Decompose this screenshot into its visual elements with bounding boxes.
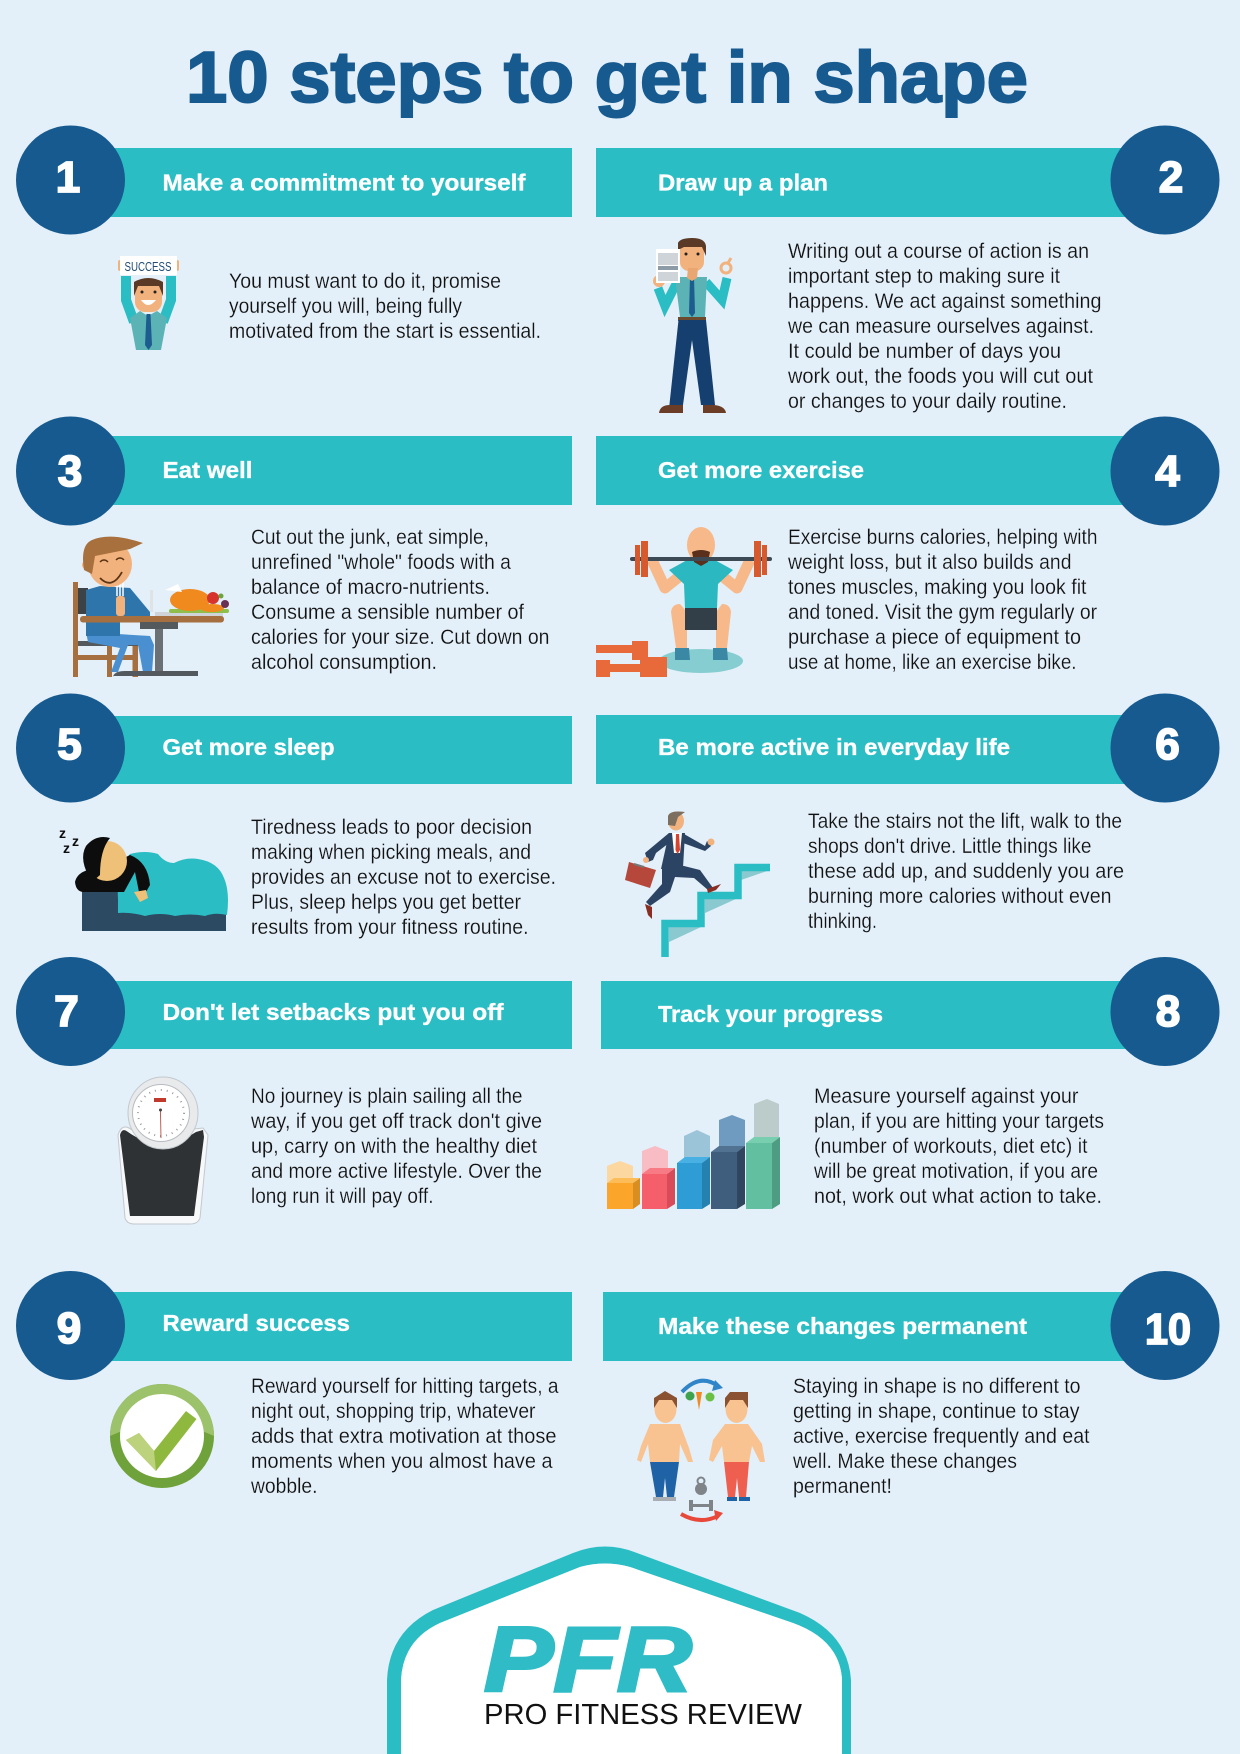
step 2 body text: important step to making sure it [788,265,1060,288]
step 3 heading: Eat well [162,457,252,483]
step 9 body text: adds that extra motivation at those [251,1425,556,1448]
step 10 body text: well. Make these changes [792,1450,1017,1473]
panel: step 9 [16,1271,572,1498]
step 6 body text: shops don't drive. Little things like [808,835,1092,858]
step 5 body text: Plus, sleep helps you get better [251,891,521,914]
logo: Pro Fitness Review badge [387,1546,851,1754]
step 7 body text: and more active lifestyle. Over the [251,1160,542,1183]
step 4 number badge: 4 [1155,447,1180,496]
step 2 body text [787,240,1102,413]
step 3 body text: alcohol consumption. [251,651,437,674]
step 7 heading: Don't let setbacks put you off [162,999,504,1025]
step 9 header bar [70,1292,572,1361]
title: 10 steps to get in shape [186,38,1028,118]
step 8 body text: plan, if you are hitting your targets [814,1110,1104,1133]
step 7 number badge [16,957,125,1066]
step 4 body text: purchase a piece of equipment to [788,626,1081,649]
step 7 header bar [70,981,572,1049]
step 6 body text: thinking. [808,910,877,933]
step 5 body text: provides an excuse not to exercise. [251,866,556,889]
step 10 header bar [603,1292,1165,1361]
icon: bathroom weighing scale [118,1077,208,1224]
icon: green check mark badge [110,1384,214,1488]
step 2 body text: It could be number of days you [788,340,1061,363]
icon: person sleeping in bed [59,825,228,931]
step 7 body text [250,1085,542,1208]
step 9 body text: night out, shopping trip, whatever [251,1400,536,1423]
step 7 body text: way, if you get off track don't give [250,1110,542,1133]
step 10 body text: getting in shape, continue to stay [793,1400,1080,1423]
step 6 body text: Take the stairs not the lift, walk to the [808,810,1122,833]
step 5 number badge: 5 [57,720,82,769]
step 8 number badge: 8 [1156,987,1180,1036]
step 8 body text: will be great motivation, if you are [813,1160,1098,1183]
panel: step 4 [596,416,1220,677]
step 2 body text: work out, the foods you will cut out [787,365,1093,388]
step 10 number badge [1110,1271,1220,1380]
step 9 body text: Reward yourself for hitting targets, a [251,1375,559,1398]
step 1 number badge: 1 [56,153,80,202]
step 5 body text: Tiredness leads to poor decision [251,816,532,839]
step 1 body text: You must want to do it, promise [229,270,501,293]
step 1 body text: yourself you will, being fully [229,295,462,318]
step 9 body text [250,1375,559,1498]
step 3 body text [251,526,550,674]
step 10 body text: Staying in shape is no different to [793,1375,1080,1398]
step 4 body text: weight loss, but it also builds and [787,551,1072,574]
step 4 body text: tones muscles, making you look fit [788,576,1087,599]
step 2 body text: Writing out a course of action is an [788,240,1089,263]
badge interior [401,1564,842,1754]
step 7 body text: long run it will pay off. [251,1185,434,1208]
step 7 body text: up, carry on with the healthy diet [251,1135,537,1158]
panel: step 6 [596,694,1220,957]
logo mark PFR: PFR [484,1609,692,1711]
step 6 body text [808,810,1124,933]
step 7 number badge: 7 [54,987,79,1036]
step 2 body text: happens. We act against something [788,290,1102,313]
step 4 header bar [596,436,1165,505]
step 5 body text: results from your fitness routine. [251,916,528,939]
icon: rising 3D bar chart [607,1099,780,1209]
step 3 header bar [70,436,572,505]
step 6 number badge [1110,694,1220,802]
panel: step 7 [16,957,572,1224]
step 2 number badge: 2 [1159,153,1183,202]
step 6 body text: burning more calories without even [808,885,1112,908]
step 3 number badge [16,416,125,526]
step 2 header bar [596,148,1165,217]
step 1 body text [229,270,541,343]
icon: person sleeping in bed: z [63,840,70,856]
step 4 body text: Exercise burns calories, helping with [788,526,1098,549]
step 10 number badge: 10 [1145,1305,1191,1354]
step 4 body text: use at home, like an exercise bike. [788,651,1076,674]
step 8 body text: (number of workouts, diet etc) it [814,1135,1088,1158]
step 2 body text: we can measure ourselves against. [787,315,1094,338]
step 3 body text: unrefined "whole" foods with a [251,551,511,574]
step 8 header bar [601,981,1165,1049]
step 10 body text: permanent! [793,1475,892,1498]
icon: man holding plan [653,238,731,413]
icon: man lifting barbell [596,527,772,677]
step 2 heading: Draw up a plan [658,170,828,196]
panel: step 2 [596,126,1220,413]
step 6 number badge: 6 [1155,720,1180,769]
step 5 number badge [16,694,125,802]
step 9 body text: moments when you almost have a [251,1450,553,1473]
icon: person sleeping in bed: z [59,825,66,841]
step 4 body text [787,526,1098,674]
icon: man eating at table [73,537,229,677]
step 5 header bar [70,716,572,784]
panel: step 1 [16,126,572,350]
step 6 heading: Be more active in everyday life [658,734,1010,760]
step 8 number badge [1110,957,1220,1066]
icon: person sleeping in bed: z [72,833,79,849]
step 4 body text: and toned. Visit the gym regularly or [788,601,1097,624]
step 4 heading: Get more exercise [658,457,864,483]
step 9 body text: wobble. [250,1475,318,1498]
icon: man holding success sign: SUCCESS [124,259,172,274]
badge outline [387,1546,851,1754]
step 10 heading: Make these changes permanent [658,1313,1027,1339]
step 3 number badge: 3 [58,447,82,496]
logo wordmark: PRO FITNESS REVIEW [484,1699,803,1731]
step 3 body text: Cut out the junk, eat simple, [251,526,489,549]
panel: step 10 [603,1271,1220,1521]
step 5 body text [251,816,556,939]
step 3 body text: calories for your size. Cut down on [251,626,550,649]
icon: businessman running up stairs [625,812,770,957]
step 3 body text: Consume a sensible number of [251,601,524,624]
step 6 header bar [596,715,1165,784]
step 10 body text: active, exercise frequently and eat [793,1425,1090,1448]
step 9 heading: Reward success [162,1310,350,1336]
step 2 number badge [1110,126,1220,234]
icon: man holding success sign [118,256,179,350]
step 1 header bar [70,148,572,217]
step 8 body text: Measure yourself against your [814,1085,1078,1108]
step 4 number badge [1110,416,1220,526]
step 7 body text: No journey is plain sailing all the [251,1085,522,1108]
step 9 number badge: 9 [57,1304,81,1353]
step 2 body text: or changes to your daily routine. [788,390,1067,413]
step 1 number badge [16,126,125,234]
step 1 heading: Make a commitment to yourself [162,170,526,196]
icon: before and after body change [637,1380,765,1521]
step 3 body text: balance of macro-nutrients. [251,576,490,599]
step 9 number badge [16,1271,125,1380]
step 6 body text: these add up, and suddenly you are [808,860,1124,883]
step 1 body text: motivated from the start is essential. [229,320,541,343]
step 5 heading: Get more sleep [162,734,334,760]
panel: step 8 [601,957,1220,1209]
step 8 body text: not, work out what action to take. [814,1185,1102,1208]
panel: step 5 [16,694,572,939]
step 10 body text [792,1375,1090,1498]
panel: step 3 [16,416,572,677]
step 8 heading: Track your progress [658,1001,883,1027]
step 5 body text: making when picking meals, and [251,841,531,864]
step 8 body text [813,1085,1104,1208]
